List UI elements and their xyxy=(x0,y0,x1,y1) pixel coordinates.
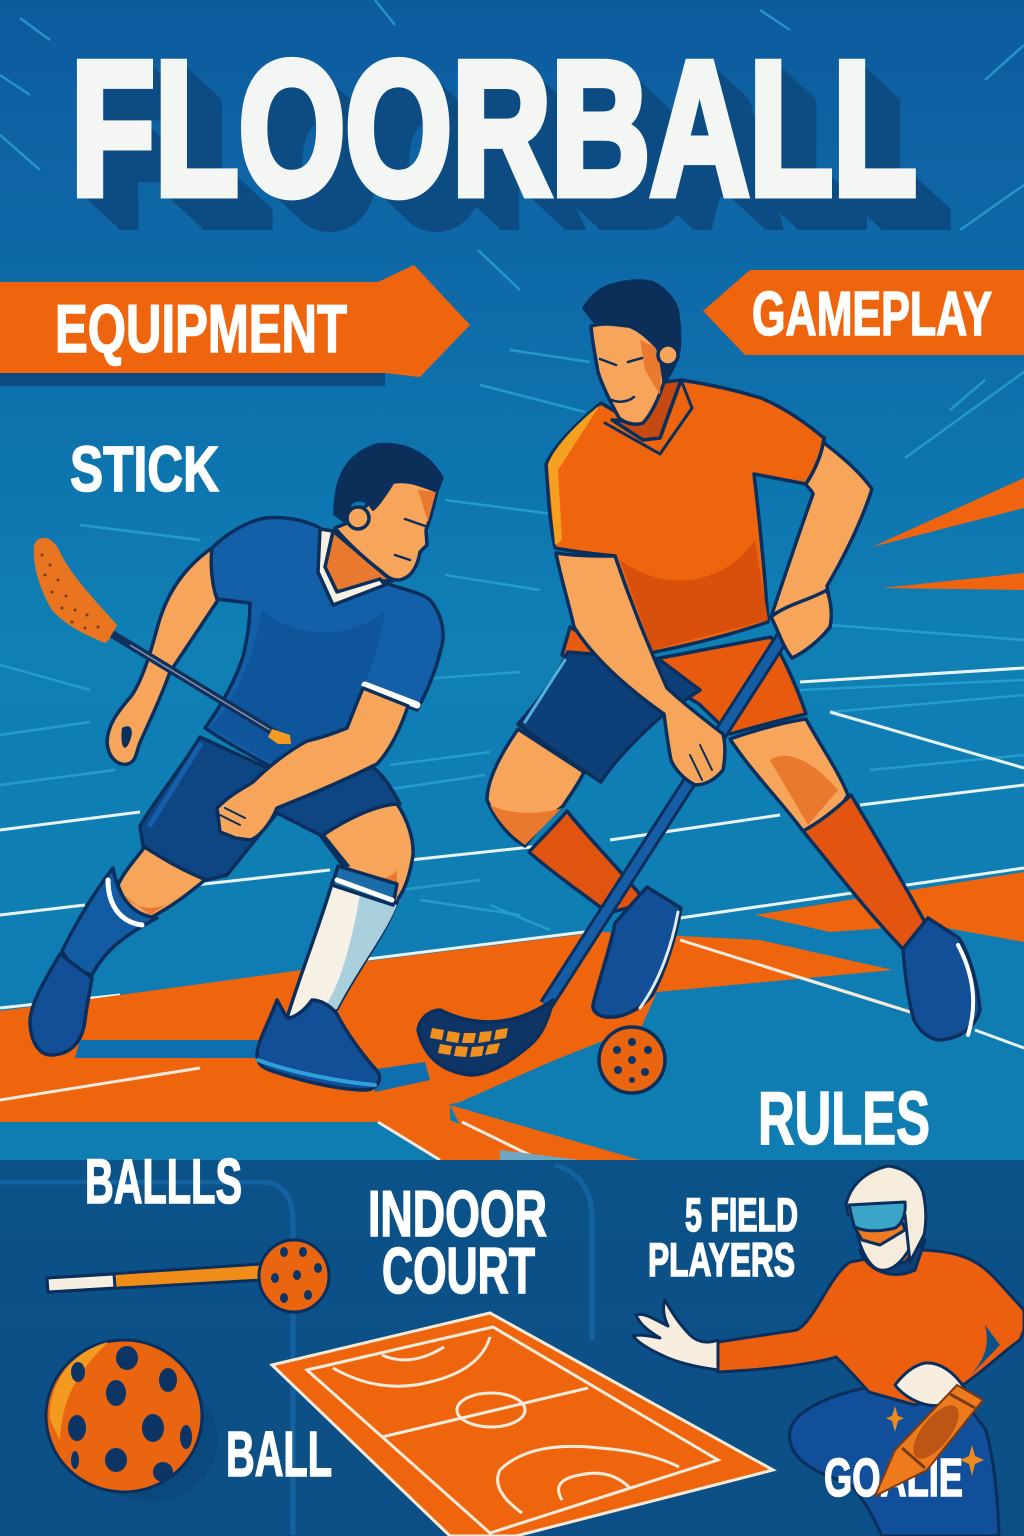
label: 5 field players: 5 FIELD xyxy=(685,1188,798,1241)
front arm xyxy=(217,688,408,840)
orange shorts xyxy=(562,627,806,734)
court diagram xyxy=(272,1313,773,1536)
goalie xyxy=(633,1166,1024,1536)
right arm xyxy=(771,438,872,658)
label: 5 field players xyxy=(648,1188,798,1286)
goalie arm gap xyxy=(968,1325,1000,1378)
front leg xyxy=(323,804,413,900)
hair xyxy=(335,445,442,523)
label: 5 field players: PLAYERS xyxy=(648,1233,795,1286)
goalie beard xyxy=(857,1212,918,1270)
hair xyxy=(584,281,680,382)
stick xyxy=(34,538,117,643)
head xyxy=(335,482,437,580)
label: ball: BALL xyxy=(226,1418,332,1490)
label: rules: RULES xyxy=(758,1076,930,1160)
goalie goggles xyxy=(849,1202,905,1231)
dark shorts xyxy=(518,652,700,782)
player: blue shirt xyxy=(30,445,443,1090)
icon: crayon xyxy=(875,1385,984,1496)
banner: gameplay xyxy=(703,270,1024,355)
icon: sparkles xyxy=(886,1406,984,1476)
icon: big ball xyxy=(46,1340,218,1502)
collar xyxy=(318,529,385,605)
court lines xyxy=(0,668,1024,1048)
title: FLOORBALL xyxy=(71,23,917,235)
orange floor xyxy=(0,872,1024,1160)
label: indoor court: COURT xyxy=(382,1234,535,1307)
goalie pants xyxy=(790,1387,999,1536)
icon: stick with ball xyxy=(47,1240,329,1312)
floor details xyxy=(0,940,920,1160)
goalie helmet xyxy=(846,1166,926,1262)
player: orange shirt xyxy=(418,281,980,1093)
shorts xyxy=(140,737,400,880)
bottom panel xyxy=(0,1160,1024,1536)
goalie glove right xyxy=(895,1363,967,1406)
shirt xyxy=(546,380,824,653)
orange rays xyxy=(872,478,1024,590)
goalie sweater xyxy=(718,1250,1024,1405)
right hand xyxy=(771,590,831,658)
stick blade xyxy=(418,1000,553,1075)
background speed lines xyxy=(0,0,1024,1025)
goalie glove left xyxy=(633,1300,718,1370)
label: stick: STICK xyxy=(70,433,219,505)
head xyxy=(591,324,665,424)
panel court decoration xyxy=(0,1165,592,1535)
banner: equipment xyxy=(0,265,470,386)
left arm xyxy=(556,553,725,785)
stick xyxy=(546,627,789,1005)
label: indoor court: INDOOR xyxy=(368,1177,547,1250)
banner label: equipment: EQUIPMENT xyxy=(55,291,347,367)
background xyxy=(0,0,1024,1160)
shirt xyxy=(205,517,443,768)
neck xyxy=(612,380,681,440)
neck xyxy=(325,531,392,592)
right leg xyxy=(730,719,848,831)
ball xyxy=(599,1027,665,1093)
goalie collar xyxy=(860,1240,925,1274)
left leg xyxy=(487,729,584,846)
label: indoor court xyxy=(368,1177,547,1307)
back arm xyxy=(107,548,218,764)
label: ballls: BALLLS xyxy=(85,1147,242,1217)
rear leg xyxy=(118,844,205,918)
